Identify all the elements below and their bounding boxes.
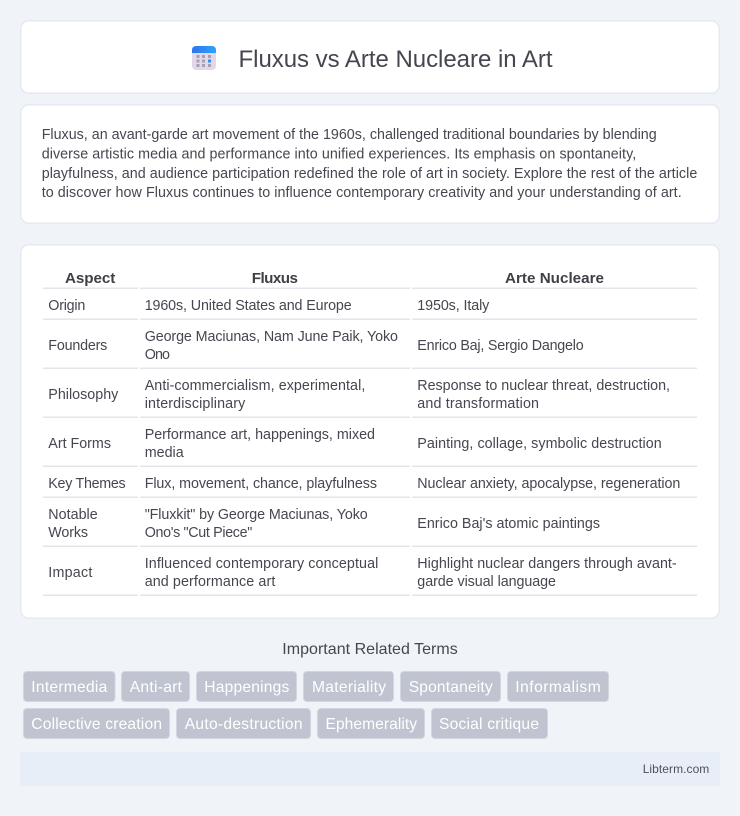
tag: Happenings xyxy=(196,672,296,702)
tag: Intermedia xyxy=(24,672,115,702)
table row: Founders xyxy=(48,329,584,363)
table row: Impact: garde visual language xyxy=(417,574,556,590)
heading: related terms: Important Related Terms xyxy=(282,641,458,658)
table header row xyxy=(65,270,604,287)
tag: Informalism: Informalism xyxy=(515,679,601,696)
table row: Notable Works xyxy=(48,507,600,541)
title: Fluxus vs Arte Nucleare in Art xyxy=(238,46,553,73)
table row: Origin: Origin xyxy=(48,298,85,314)
tag: Materiality: Materiality xyxy=(312,679,386,696)
table header row: Arte Nucleare xyxy=(505,270,604,287)
table row: Art Forms: media xyxy=(145,445,184,461)
table row: Impact: Influenced contemporary conceptual xyxy=(145,556,378,572)
table row: Philosophy: and transformation xyxy=(417,396,539,412)
table row: Notable Works: Works xyxy=(48,525,88,541)
tag: Ephemerality xyxy=(318,708,424,738)
text block: intro paragraph: diverse artistic media and performance into unified experiences. Its emphasis on spontaneity, xyxy=(42,146,636,162)
table header row: Fluxus xyxy=(252,270,298,287)
table row: Art Forms xyxy=(48,427,662,461)
table row: Notable Works: "Fluxkit" by George Maciunas, Yoko xyxy=(145,507,368,523)
table row: Impact: Impact xyxy=(48,565,92,581)
tag: Happenings: Happenings xyxy=(204,679,290,696)
table row: Founders: Ono xyxy=(145,347,170,363)
panel: comparison table xyxy=(21,245,719,618)
tag: Spontaneity xyxy=(400,672,500,702)
table row: Founders: Enrico Baj, Sergio Dangelo xyxy=(417,338,584,354)
table row: Art Forms: Painting, collage, symbolic destruction xyxy=(417,436,662,452)
table row: Origin: 1950s, Italy xyxy=(417,298,490,314)
text block: intro paragraph: Fluxus, an avant-garde art movement of the 1960s, challenged traditional boundaries by blending xyxy=(42,127,657,143)
tag: Ephemerality: Ephemerality xyxy=(326,716,417,733)
tag: Anti-art xyxy=(122,672,190,702)
table row: Key Themes: Key Themes xyxy=(48,476,126,492)
table row: Philosophy: interdisciplinary xyxy=(145,396,246,412)
table row: Philosophy: Anti-commercialism, experimental, xyxy=(145,378,365,394)
table row: Key Themes: Flux, movement, chance, playfulness xyxy=(145,476,377,492)
footer credit: Libterm.com xyxy=(643,762,709,776)
table row: Art Forms: Art Forms xyxy=(48,436,111,452)
table row: Philosophy: Philosophy xyxy=(48,387,119,403)
tag: Auto-destruction xyxy=(176,708,310,738)
table row: Philosophy: Response to nuclear threat, destruction, xyxy=(417,378,670,394)
table row: Art Forms: Performance art, happenings, mixed xyxy=(145,427,375,443)
footer xyxy=(20,752,720,786)
tag: Social critique: Social critique xyxy=(439,716,539,733)
table row: Notable Works: Notable xyxy=(48,507,98,523)
text block: intro paragraph: to discover how Fluxus continues to influence contemporary creativity and your understanding of art. xyxy=(42,185,682,201)
table row: Notable Works: Ono's "Cut Piece" xyxy=(145,525,252,541)
table row: Key Themes: Nuclear anxiety, apocalypse, regeneration xyxy=(417,476,680,492)
panel: title header xyxy=(21,21,719,93)
panel: related term tags xyxy=(24,672,608,738)
tag: Intermedia: Intermedia xyxy=(31,679,108,696)
tag: Materiality xyxy=(304,672,394,702)
tag: Auto-destruction: Auto-destruction xyxy=(185,716,302,733)
table row: Origin xyxy=(48,298,490,314)
text block: intro paragraph: playfulness, and audience participation redefined the role of art in society. Explore the rest of the article xyxy=(42,166,697,182)
table row: Founders: George Maciunas, Nam June Paik, Yoko xyxy=(145,329,398,345)
table header row: Aspect xyxy=(65,270,115,287)
tag: Spontaneity: Spontaneity xyxy=(409,679,493,696)
table row: Impact: and performance art xyxy=(145,574,275,590)
icon: calendar xyxy=(192,46,216,70)
text block: intro paragraph xyxy=(42,127,697,201)
table row: Founders: Founders xyxy=(48,338,107,354)
panel: introduction xyxy=(21,105,719,223)
tag: Collective creation: Collective creation xyxy=(31,716,162,733)
table row: Philosophy xyxy=(48,378,670,412)
table row: Impact: Highlight nuclear dangers through avant- xyxy=(417,556,677,572)
tag: Anti-art: Anti-art xyxy=(130,679,183,696)
tag: Social critique xyxy=(432,708,548,738)
table row: Impact xyxy=(48,556,677,590)
table row: Notable Works: Enrico Baj's atomic paintings xyxy=(417,516,600,532)
table row: Key Themes xyxy=(48,476,680,492)
table row: Origin: 1960s, United States and Europe xyxy=(145,298,352,314)
tag: Informalism xyxy=(508,672,608,702)
tag: Collective creation xyxy=(24,708,170,738)
